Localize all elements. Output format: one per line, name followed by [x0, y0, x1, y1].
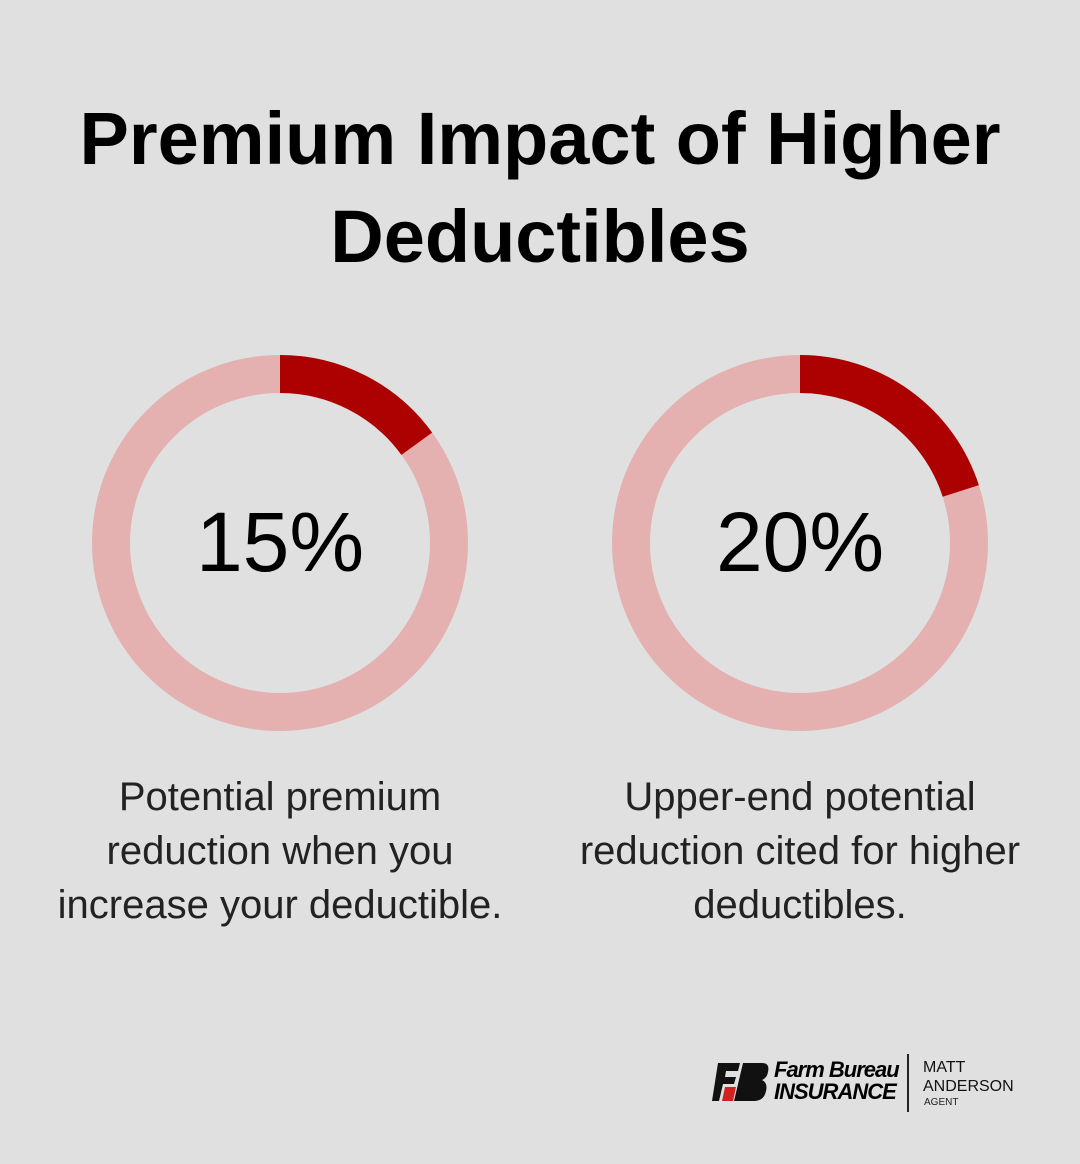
logo: Farm Bureau Insurance / Matt Anderson: Farm Bureau	[774, 1057, 899, 1082]
text: right description: Upper-end potential	[624, 775, 976, 819]
logo: Farm Bureau Insurance / Matt Anderson: MATT	[923, 1059, 965, 1076]
text: right description: deductibles.	[693, 883, 907, 927]
text: left description: reduction when you	[107, 829, 453, 873]
text: left description	[58, 775, 502, 927]
logo: Farm Bureau Insurance / Matt Anderson: INSURANCE	[774, 1079, 896, 1104]
logo: Farm Bureau Insurance / Matt Anderson: AGENT	[924, 1097, 958, 1108]
icon: FB mark	[712, 1063, 768, 1101]
title	[79, 97, 1001, 278]
text: left description: Potential premium	[119, 775, 441, 819]
logo: Farm Bureau Insurance / Matt Anderson: ANDERSON	[923, 1078, 1014, 1095]
donut chart: 20%: 20%	[716, 495, 884, 589]
text: right description	[580, 775, 1020, 927]
title: Deductibles	[330, 195, 750, 278]
donut chart: 15%	[92, 355, 468, 731]
text: right description: reduction cited for higher	[580, 829, 1020, 873]
donut chart: 20%	[612, 355, 988, 731]
text: left description: increase your deductible.	[58, 883, 502, 927]
logo: Farm Bureau Insurance / Matt Anderson	[712, 1054, 1014, 1112]
title: Premium Impact of Higher	[79, 97, 1001, 180]
donut chart: 15%: 15%	[196, 495, 364, 589]
